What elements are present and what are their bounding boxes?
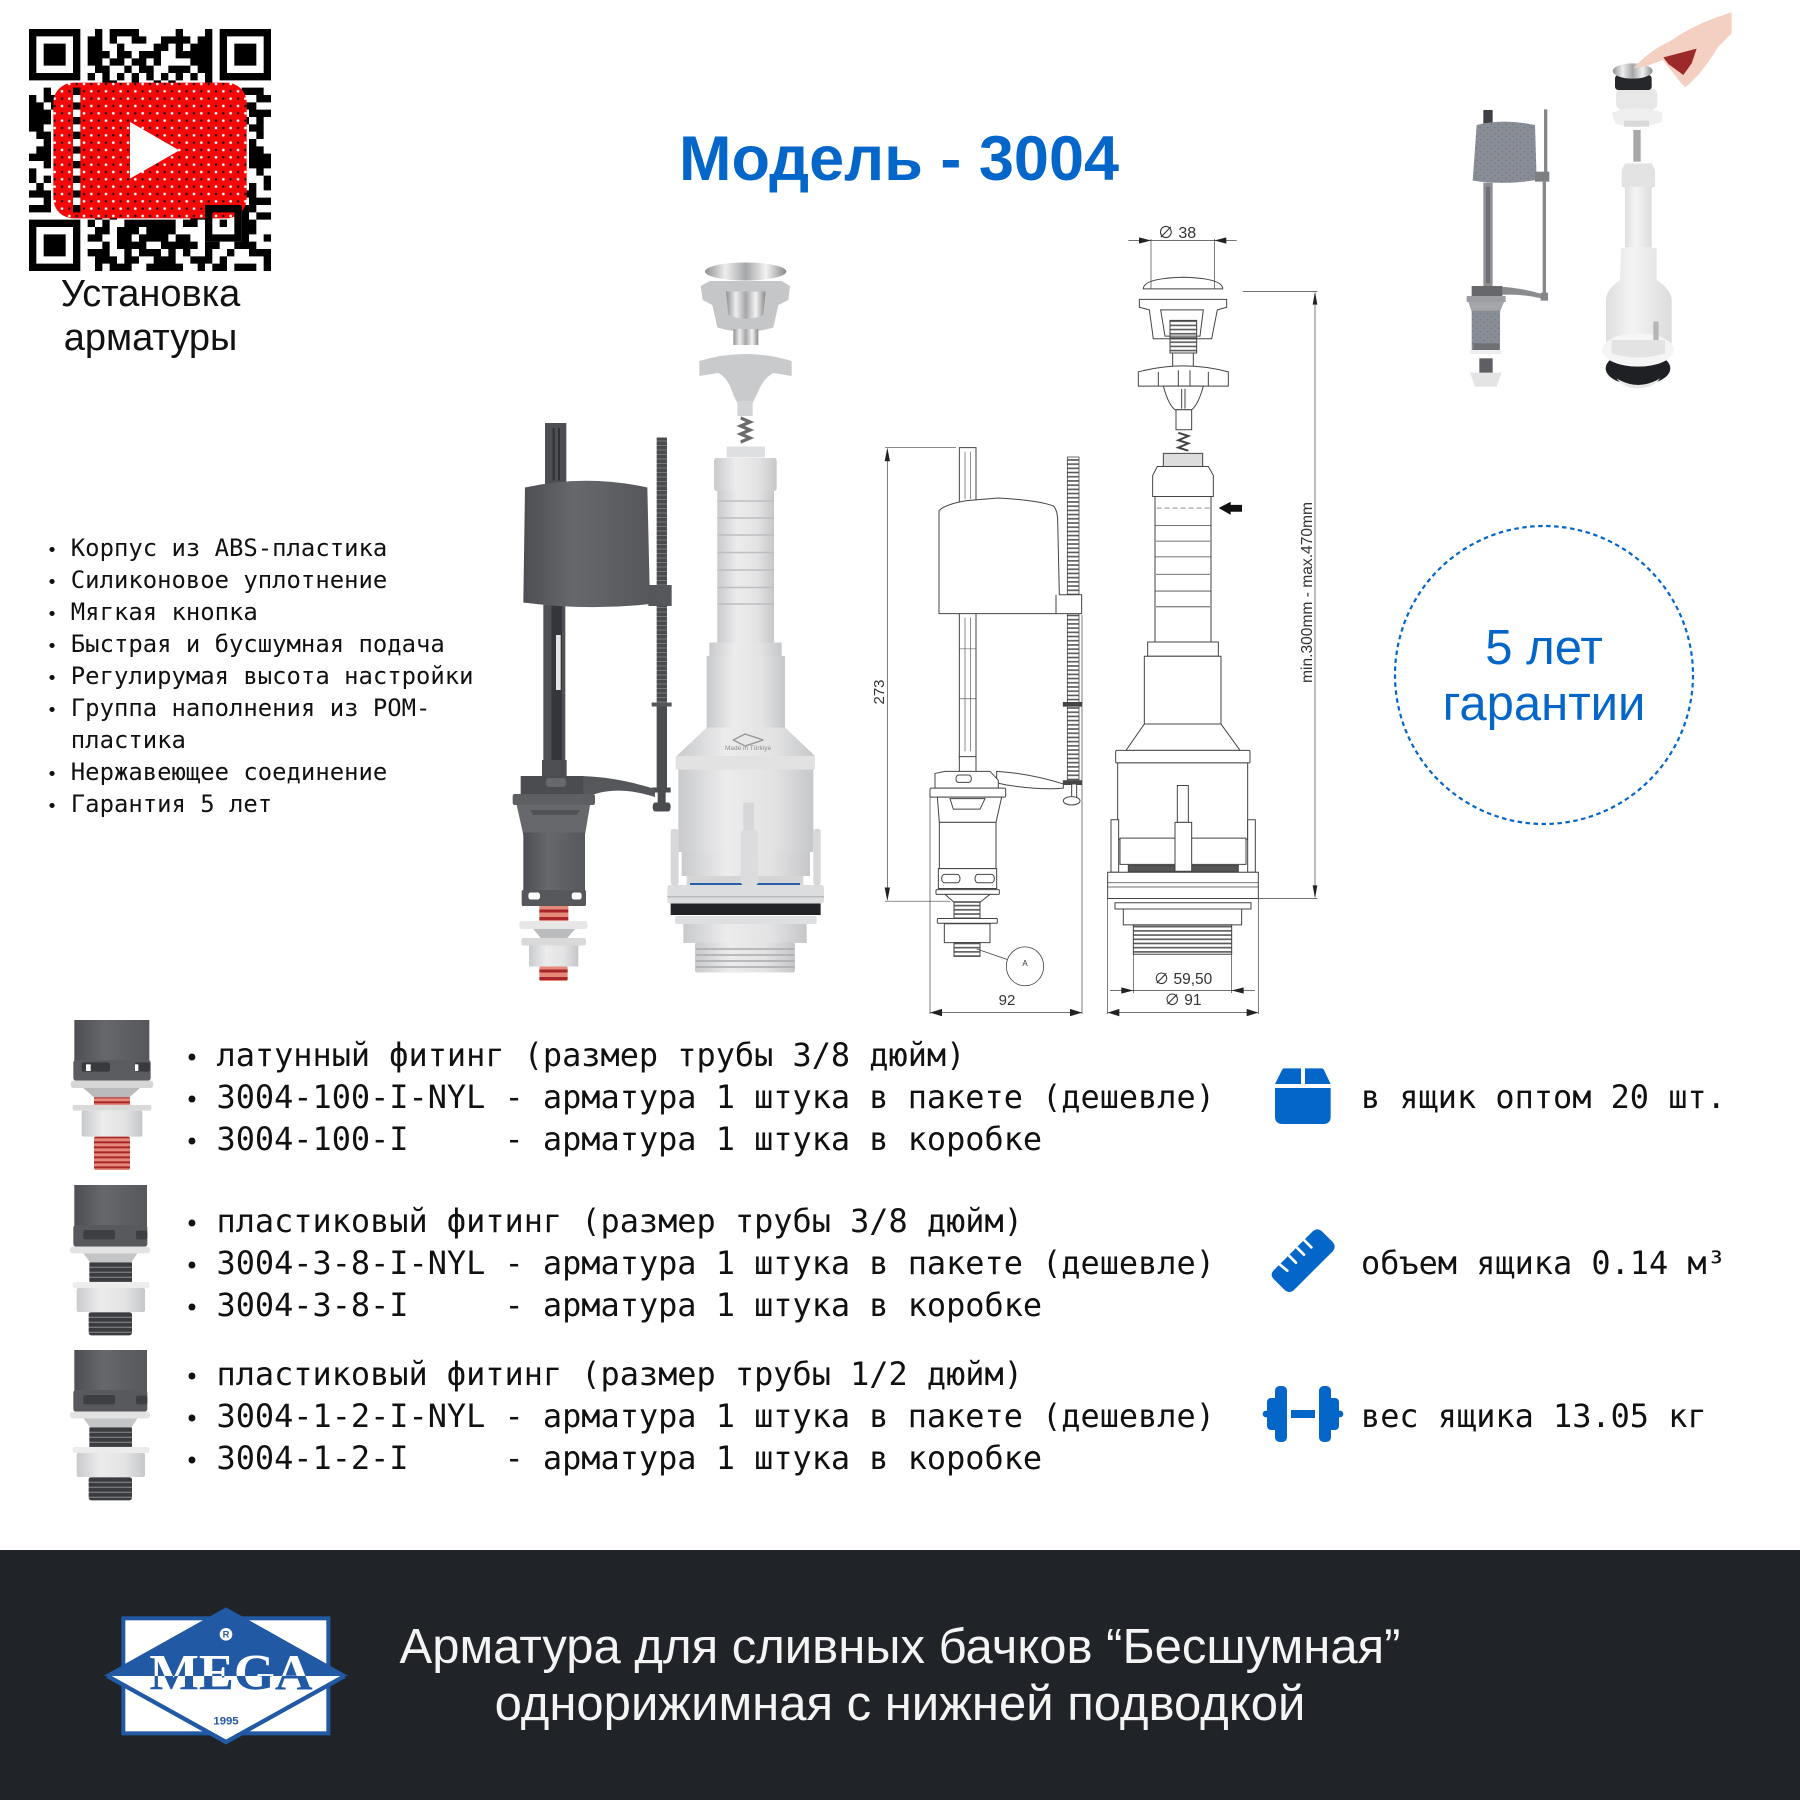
timing stripe through logo (73, 88, 80, 212)
logo: MEGA (103, 1607, 348, 1742)
dimension height range (1243, 291, 1317, 899)
footer headline: Арматура для сливных бачков “Бесшумная” (400, 1620, 1400, 1674)
features list: • (47, 572, 57, 593)
title: Модель - 3004 (679, 124, 1119, 194)
icon: ruler (1272, 1229, 1335, 1292)
option list: plastic fitting 1/2: пластиковый фитинг (размер трубы 1/2 дюйм) (216, 1355, 1023, 1393)
features list: Нержавеющее соединение (71, 758, 387, 786)
features list: Регулирумая высота настройки (71, 662, 474, 690)
dimension diameter 91 (1108, 899, 1258, 1016)
timing stripe light cells (73, 95, 80, 205)
features list: Гарантия 5 лет (71, 790, 272, 818)
features list: • (47, 700, 57, 721)
fitting: brass (71, 1020, 153, 1170)
packaging facts: вес ящика 13.05 кг (1361, 1397, 1707, 1435)
option list: brass fitting: • (185, 1128, 199, 1156)
dimension 273: 273 (871, 679, 888, 705)
dimension diameter 59.50 (1110, 954, 1255, 994)
warranty badge (1395, 526, 1693, 824)
dimension 92: 92 (999, 992, 1015, 1009)
callout A (977, 947, 1044, 986)
dimension height range: min.300mm - max.470mm (1299, 502, 1316, 683)
option list: brass fitting: 3004-100-I - арматура 1 штука в коробке (216, 1120, 1042, 1158)
small flush valve photo (1602, 63, 1674, 388)
packaging facts (1361, 1078, 1726, 1435)
logo diamond (103, 1607, 348, 1742)
fitting thumbnails (70, 1020, 153, 1500)
caption: installation video: Установка (61, 273, 241, 315)
option list: brass fitting: • (185, 1086, 199, 1114)
fitting: plastic 1/2 (70, 1350, 150, 1500)
registered mark (220, 1628, 232, 1641)
features list: Группа наполнения из POM- (71, 694, 430, 722)
fitting: plastic 3/8 (70, 1185, 150, 1335)
dimension 92 (930, 615, 1082, 1016)
features list (47, 534, 474, 818)
option list: plastic fitting 3/8: • (185, 1210, 199, 1238)
logo wordmark: MEGA (149, 1644, 313, 1700)
dimension diameter 38: ∅ 38 (1158, 225, 1196, 242)
dimension diameter 38 (1128, 225, 1237, 289)
technical drawing (871, 225, 1317, 1016)
features list: пластика (71, 726, 186, 754)
packaging facts: в ящик оптом 20 шт. (1361, 1078, 1726, 1116)
logo wordmark: MEGA (149, 1644, 313, 1700)
packaging icons (1263, 1068, 1343, 1442)
option list: plastic fitting 1/2: 3004-1-2-I-NYL - арматура 1 штука в пакете (дешевле) (216, 1397, 1215, 1435)
alignment pattern (205, 205, 242, 242)
icon: box (1275, 1068, 1331, 1124)
fill valve (513, 423, 672, 981)
caption: installation video: арматуры (64, 317, 237, 359)
black arrow (1219, 502, 1242, 515)
option list: brass fitting: 3004-100-I-NYL - арматура 1 штука в пакете (дешевле) (216, 1078, 1215, 1116)
QR code with video logo (29, 33, 271, 267)
small fill valve photo (1467, 109, 1549, 387)
option list: plastic fitting 1/2: • (185, 1447, 199, 1475)
option list: brass fitting: • (185, 1044, 199, 1072)
option list: plastic fitting 1/2: • (185, 1405, 199, 1433)
small photos with hand (1467, 12, 1732, 388)
registered mark: R (223, 1630, 230, 1640)
logo wordmark (150, 1656, 312, 1690)
dimension diameter 91: ∅ 91 (1164, 992, 1202, 1009)
hand pressing button (1633, 12, 1732, 87)
features list: • (47, 668, 57, 689)
packaging facts: объем ящика 0.14 м³ (1361, 1244, 1726, 1282)
dimension diameter 59.50: ∅ 59,50 (1154, 971, 1213, 988)
features list: Силиконовое уплотнение (71, 566, 387, 594)
features list: • (47, 540, 57, 561)
features list: • (47, 796, 57, 817)
footer band (0, 1550, 1800, 1800)
play triangle (130, 122, 179, 179)
option list: plastic fitting 3/8: 3004-3-8-I-NYL - арматура 1 штука в пакете (дешевле) (216, 1244, 1215, 1282)
features list: • (47, 636, 57, 657)
logo frame (123, 1618, 328, 1733)
option list: plastic fitting 3/8: • (185, 1252, 199, 1280)
option list: plastic fitting 1/2: 3004-1-2-I - арматура 1 штука в коробке (216, 1439, 1042, 1477)
warranty badge: гарантии (1443, 677, 1645, 731)
option list: brass fitting: латунный фитинг (размер трубы 3/8 дюйм) (216, 1036, 965, 1074)
features list: • (47, 764, 57, 785)
flush valve outline (1108, 277, 1258, 954)
option list: plastic fitting 1/2 (185, 1355, 1215, 1477)
option list: plastic fitting 1/2: • (185, 1363, 199, 1391)
video logo red tile (53, 83, 247, 218)
option list: plastic fitting 3/8: • (185, 1294, 199, 1322)
dimension 273 (871, 448, 956, 901)
option list: plastic fitting 3/8 (185, 1202, 1215, 1324)
fill valve outline (930, 448, 1082, 956)
features list: Корпус из ABS-пластика (71, 534, 387, 562)
option list: brass fitting (185, 1036, 1215, 1158)
icon: dumbbell (1263, 1386, 1343, 1442)
option list: plastic fitting 3/8: 3004-3-8-I - арматура 1 штука в коробке (216, 1286, 1042, 1324)
product photo (513, 262, 824, 981)
warranty badge: 5 лет (1485, 621, 1603, 675)
QR code modules (29, 33, 271, 267)
features list: • (47, 604, 57, 625)
features list: Мягкая кнопка (71, 598, 258, 626)
flush valve (667, 262, 824, 972)
option list: plastic fitting 3/8: пластиковый фитинг (размер трубы 3/8 дюйм) (216, 1202, 1023, 1240)
features list: Быстрая и бусшумная подача (71, 630, 445, 658)
year: 1995 (213, 1716, 239, 1728)
footer headline: однорижимная с нижней подводкой (495, 1677, 1305, 1731)
callout A: A (1022, 959, 1028, 968)
moulded mark on flush valve: Made in Türkiye (725, 745, 771, 752)
